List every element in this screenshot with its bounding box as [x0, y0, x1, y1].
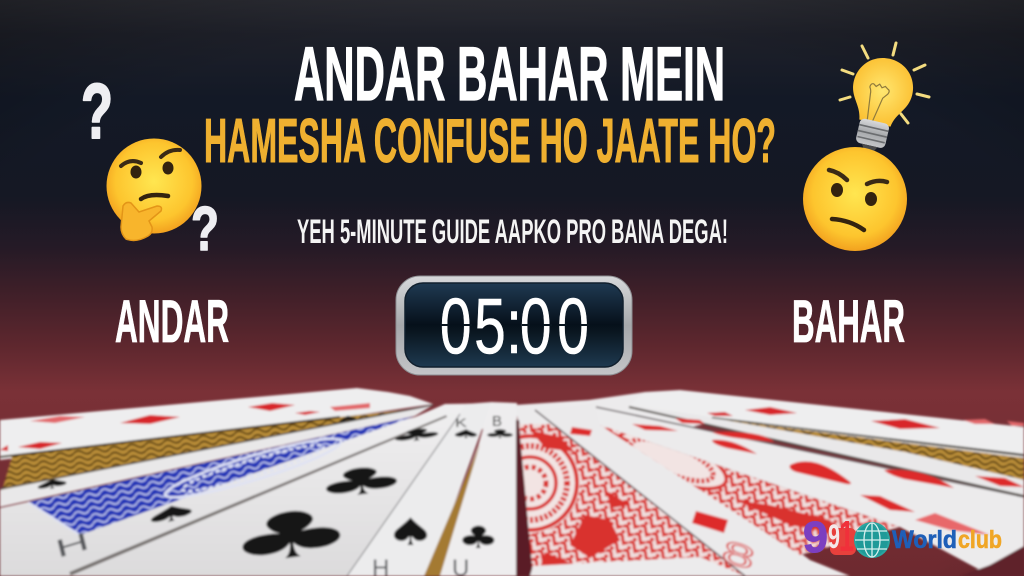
left spade card: ♠ — [30, 473, 74, 495]
right top card with red diamonds — [630, 390, 1024, 454]
icon: light bulb — [839, 43, 929, 157]
right red card back — [518, 422, 744, 576]
logo wordmark: World — [892, 526, 957, 554]
logo wordmark: club — [958, 526, 1002, 554]
right card 8 of diamonds — [535, 403, 850, 576]
icon: skeptical face — [803, 147, 907, 251]
timer — [396, 276, 632, 375]
logo globe — [855, 523, 889, 557]
logo — [803, 512, 1002, 562]
right card fan top edge — [515, 392, 720, 445]
icon: question mark left: ? — [81, 67, 113, 155]
club card — [70, 404, 492, 576]
right lower-edge card — [629, 407, 1024, 496]
card edge shadow — [70, 417, 447, 574]
right bottom corner table — [960, 546, 1024, 576]
king spade card: ♠ — [385, 510, 436, 554]
right second red card back — [600, 417, 900, 555]
right middle card: B — [492, 413, 502, 430]
left spade card: ♠ — [335, 412, 361, 426]
logo numerals — [803, 512, 856, 562]
logo numerals: 9 — [828, 518, 840, 556]
right gold card back — [712, 417, 1024, 480]
left spade card — [0, 405, 433, 507]
playing cards fan — [0, 388, 1024, 576]
card corner letter: H — [53, 527, 92, 563]
logo numerals: 1 — [839, 512, 854, 561]
right middle card: ♣ — [483, 427, 517, 441]
icon: question mark right: ? — [191, 195, 219, 264]
right card with heart — [596, 407, 1024, 570]
left top card with red diamonds — [0, 388, 433, 460]
blue card back — [28, 416, 415, 535]
logo wordmark — [892, 526, 1002, 554]
icon: thinking face — [106, 138, 202, 240]
club card: ♣ — [388, 422, 445, 448]
right middle card: ♣ — [457, 520, 500, 556]
label: andar: ANDAR — [115, 288, 229, 355]
king spade card: ♠ — [449, 427, 483, 441]
logo numerals: 9 — [803, 513, 828, 562]
left gold card back — [0, 408, 420, 497]
right middle card — [424, 402, 517, 576]
club card: ♣ — [310, 455, 412, 509]
centre gap — [516, 420, 534, 576]
king spade card — [347, 402, 492, 576]
king spade card: K — [455, 417, 468, 430]
left lower card — [0, 403, 515, 576]
timer digits: 05:00 — [440, 282, 589, 370]
lower left card spade: ♠ — [140, 495, 203, 533]
label: bahar: BAHAR — [792, 288, 905, 355]
